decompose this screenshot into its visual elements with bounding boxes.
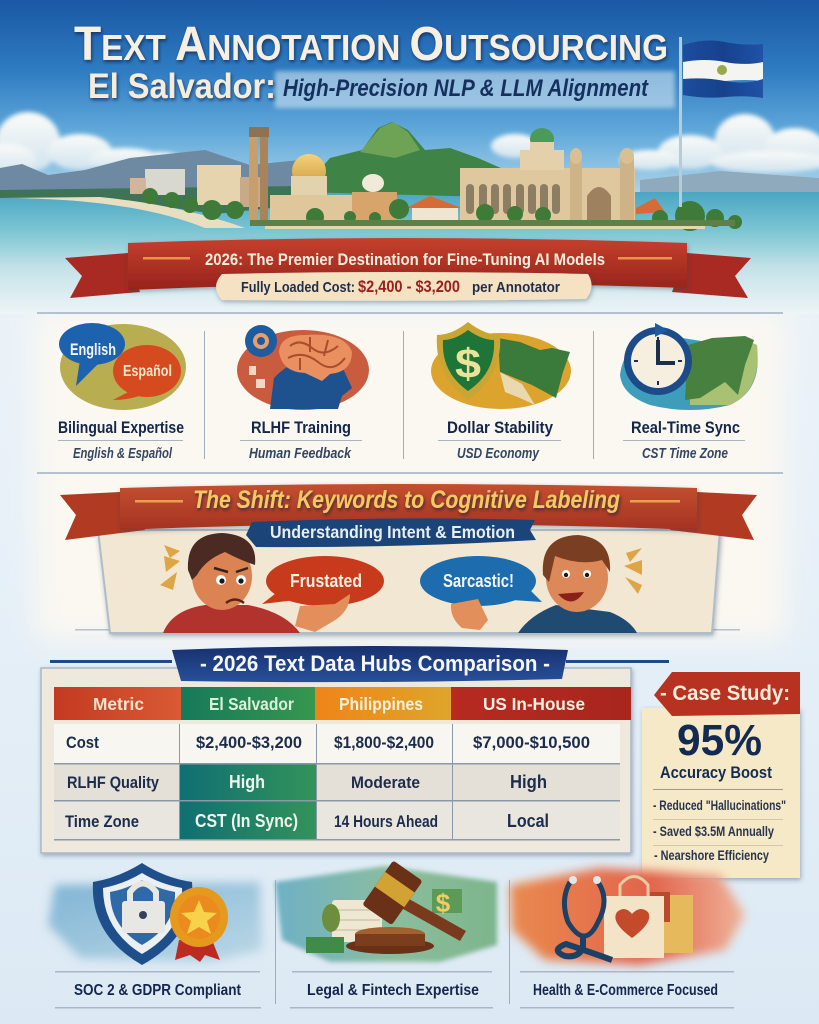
cost strip: $2,400 - $3,200 <box>358 277 460 296</box>
cathedral <box>460 168 635 222</box>
mountains <box>0 150 300 196</box>
feature: RLHF training: RLHF Training <box>251 418 351 437</box>
speech bubble: frustrated <box>262 556 384 606</box>
icon: shield, lock and medal <box>48 863 262 965</box>
palace <box>270 195 355 221</box>
table heading: - 2026 Text Data Hubs Comparison - <box>200 651 550 676</box>
feature: health and e-commerce <box>510 868 745 1008</box>
cost strip <box>216 272 592 301</box>
table row: cost: $1,800-$2,400 <box>334 733 434 752</box>
table row: time zone: Time Zone <box>65 812 139 831</box>
icon: speech bubbles <box>59 323 186 410</box>
icon: open hand <box>295 594 350 632</box>
table heading <box>172 646 568 682</box>
title: TEXT ANNOTATION OUTSOURCING <box>74 18 668 71</box>
hero landscape scene <box>0 0 819 314</box>
table header row: Philippines <box>339 694 423 714</box>
feature: dollar stability <box>431 322 571 462</box>
feature: health and e-commerce: Health & E-Commerce Focused <box>533 982 718 999</box>
table header row: El Salvador <box>209 694 294 714</box>
table row: cost: $7,000-$10,500 <box>473 733 590 752</box>
feature: real-time sync: CST Time Zone <box>642 445 728 462</box>
red ribbon banner: premier destination: 2026: The Premier Destination for Fine-Tuning AI Models <box>205 251 605 269</box>
person: sarcastic <box>518 535 637 633</box>
subtitle: High-Precision NLP & LLM Alignment <box>283 75 649 102</box>
table row: RLHF quality: High <box>510 772 547 792</box>
icon: speech bubbles: English <box>70 340 116 359</box>
feature: bilingual expertise <box>58 323 186 462</box>
city buildings <box>145 169 185 195</box>
callout: case study: - Saved $3.5M Annually <box>653 824 774 839</box>
callout: case study: - Case Study: <box>660 682 790 705</box>
feature: RLHF training: Human Feedback <box>249 445 352 462</box>
icon: gavel, documents and money: $ <box>436 888 451 918</box>
icon: stethoscope and shopping bags <box>510 868 745 965</box>
beach <box>0 197 245 228</box>
dividers and rules: bottom row <box>275 880 510 1004</box>
speech bubble: sarcastic <box>420 556 542 606</box>
feature: RLHF training <box>237 325 369 462</box>
callout: case study: Accuracy Boost <box>660 763 772 782</box>
table row: cost: $2,400-$3,200 <box>196 733 302 752</box>
table row: RLHF quality: High <box>229 772 265 792</box>
icon: clock and map <box>620 323 758 410</box>
person: frustrated <box>163 533 300 633</box>
table row: cost: Cost <box>66 733 99 752</box>
callout: case study: 95% <box>677 716 762 765</box>
icon: speech bubbles: Español <box>123 363 172 380</box>
clouds <box>0 112 819 176</box>
feature: real-time sync <box>620 323 758 462</box>
feature: SOC 2 and GDPR <box>48 863 262 1008</box>
feature: dollar stability: Dollar Stability <box>447 418 553 437</box>
speech bubble: sarcastic: Sarcastic! <box>443 571 514 591</box>
feature: real-time sync: Real-Time Sync <box>631 418 740 437</box>
red ribbon banner: premier destination <box>65 238 751 301</box>
speech bubble: frustrated: Frustated <box>290 571 362 591</box>
red ribbon banner: the shift <box>60 484 757 540</box>
green hill <box>300 122 530 198</box>
table row: time zone: Local <box>507 811 549 831</box>
ground strip <box>250 220 735 226</box>
table row: RLHF quality: Moderate <box>351 773 420 792</box>
cost strip: Fully Loaded Cost: <box>241 279 355 296</box>
tower <box>249 130 258 225</box>
comparison table panel <box>41 660 669 853</box>
feature: dollar stability: USD Economy <box>457 445 540 462</box>
table row: time zone: CST (In Sync) <box>195 811 298 831</box>
feature: legal and fintech <box>275 860 497 1008</box>
callout: case study: - Nearshore Efficiency <box>654 848 769 863</box>
feature: legal and fintech: Legal & Fintech Expertise <box>307 982 479 999</box>
feature: bilingual expertise: English & Español <box>73 445 173 462</box>
table row: RLHF quality <box>54 763 620 801</box>
red ribbon banner: the shift: The Shift: Keywords to Cognitive Labeling <box>193 486 620 514</box>
table row: cost <box>54 724 620 763</box>
icon: brain and gear <box>237 325 369 410</box>
cost strip: per Annotator <box>472 279 560 296</box>
blue strip: understanding intent and emotion <box>246 518 536 547</box>
table row: time zone <box>54 801 620 840</box>
accent marks <box>160 545 642 594</box>
blue strip: understanding intent and emotion: Understanding Intent & Emotion <box>270 522 515 542</box>
table row: time zone: 14 Hours Ahead <box>334 812 438 831</box>
flag of El Salvador <box>679 37 763 207</box>
callout: case study <box>642 672 800 878</box>
table header row: Metric <box>93 694 144 714</box>
feature: bilingual expertise: Bilingual Expertise <box>58 418 184 437</box>
subtitle: El Salvador: <box>88 67 276 106</box>
table row: RLHF quality: RLHF Quality <box>67 773 159 792</box>
icon: pointing fist <box>451 599 488 630</box>
feature: SOC 2 and GDPR: SOC 2 & GDPR Compliant <box>74 982 242 999</box>
trees <box>142 188 742 231</box>
subtitle <box>88 67 675 108</box>
icon: shield and map: $ <box>455 340 481 387</box>
icon: gavel, documents and money <box>275 860 497 962</box>
panel: cognitive labeling scene <box>98 530 720 633</box>
table header row <box>54 687 631 720</box>
table header row: US In-House <box>483 694 585 714</box>
